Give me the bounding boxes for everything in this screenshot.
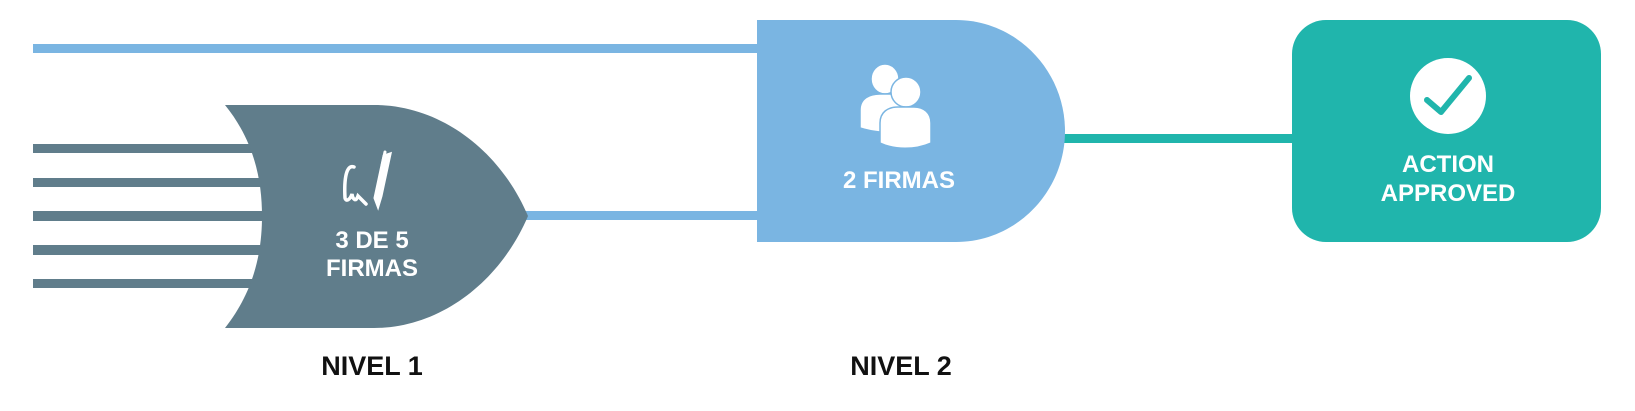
label: nivel 2: NIVEL 2 xyxy=(850,351,952,381)
connector nivel1 to nivel2 xyxy=(520,211,760,220)
box: action approved xyxy=(1292,20,1601,242)
icon: signature xyxy=(345,152,390,206)
gate: nivel 1 xyxy=(225,105,528,328)
top input line xyxy=(33,44,763,53)
label: nivel 1: NIVEL 1 xyxy=(321,351,423,381)
box: action approved: APPROVED xyxy=(1381,180,1515,207)
gate: nivel 1: FIRMAS xyxy=(326,255,418,282)
text: 2 firmas: 2 FIRMAS xyxy=(843,167,955,194)
text: action approved: ACTION xyxy=(1402,151,1494,178)
gate: nivel 2 xyxy=(757,20,1065,242)
icon: people xyxy=(860,64,931,148)
icon: check circle xyxy=(1410,58,1486,134)
connector nivel2 to approved xyxy=(1060,134,1295,143)
text: 3 de 5 firmas: 3 DE 5 xyxy=(335,227,409,254)
input lines nivel 1 xyxy=(33,144,263,288)
